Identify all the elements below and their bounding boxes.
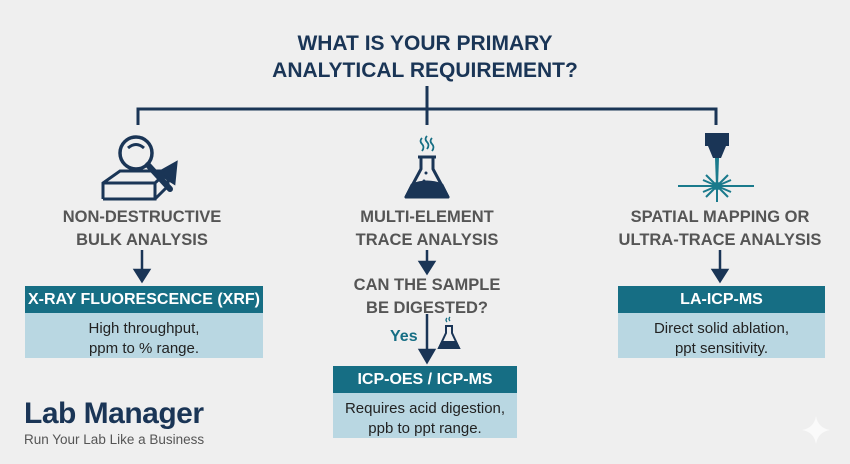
box: ICP: ppb to ppt range. <box>368 420 482 437</box>
label: spatial mapping: ULTRA-TRACE ANALYSIS <box>619 231 821 249</box>
box: LA-ICP-MS: LA-ICP-MS <box>680 291 763 308</box>
question: digested <box>354 276 500 317</box>
label: spatial mapping: SPATIAL MAPPING OR <box>631 208 809 226</box>
question: digested: BE DIGESTED? <box>366 299 488 317</box>
logo <box>24 397 204 447</box>
question: digested: CAN THE SAMPLE <box>354 276 500 294</box>
label: spatial mapping <box>619 208 821 249</box>
box: XRF <box>25 286 263 358</box>
box: XRF: High throughput, <box>89 320 199 337</box>
box: LA-ICP-MS: Direct solid ablation, <box>654 320 789 337</box>
box: XRF: X-RAY FLUORESCENCE (XRF) <box>28 291 260 308</box>
title: ANALYTICAL REQUIREMENT? <box>272 59 578 82</box>
label: non-destructive <box>63 208 221 249</box>
box: LA-ICP-MS: ppt sensitivity. <box>675 340 768 357</box>
title <box>272 32 578 82</box>
title: WHAT IS YOUR PRIMARY <box>297 32 553 55</box>
icon: laser <box>678 133 754 202</box>
sparkle <box>804 418 828 442</box>
box: ICP: ICP-OES / ICP-MS <box>357 371 493 388</box>
box: XRF: ppm to % range. <box>89 340 199 357</box>
label: non-destructive: BULK ANALYSIS <box>76 231 208 249</box>
icon: magnifier over block <box>102 135 178 200</box>
icon: small flask <box>437 316 461 349</box>
box: ICP: Requires acid digestion, <box>345 400 505 417</box>
box: ICP <box>333 366 517 438</box>
box: LA-ICP-MS <box>618 286 825 358</box>
label: multi-element: TRACE ANALYSIS <box>356 231 498 249</box>
icon: flask <box>404 135 450 198</box>
label: multi-element: MULTI-ELEMENT <box>360 208 494 226</box>
logo: Lab Manager <box>24 397 204 430</box>
yes label: Yes <box>390 328 418 345</box>
label: multi-element <box>356 208 498 249</box>
logo: Run Your Lab Like a Business <box>24 432 204 447</box>
label: non-destructive: NON-DESTRUCTIVE <box>63 208 221 226</box>
